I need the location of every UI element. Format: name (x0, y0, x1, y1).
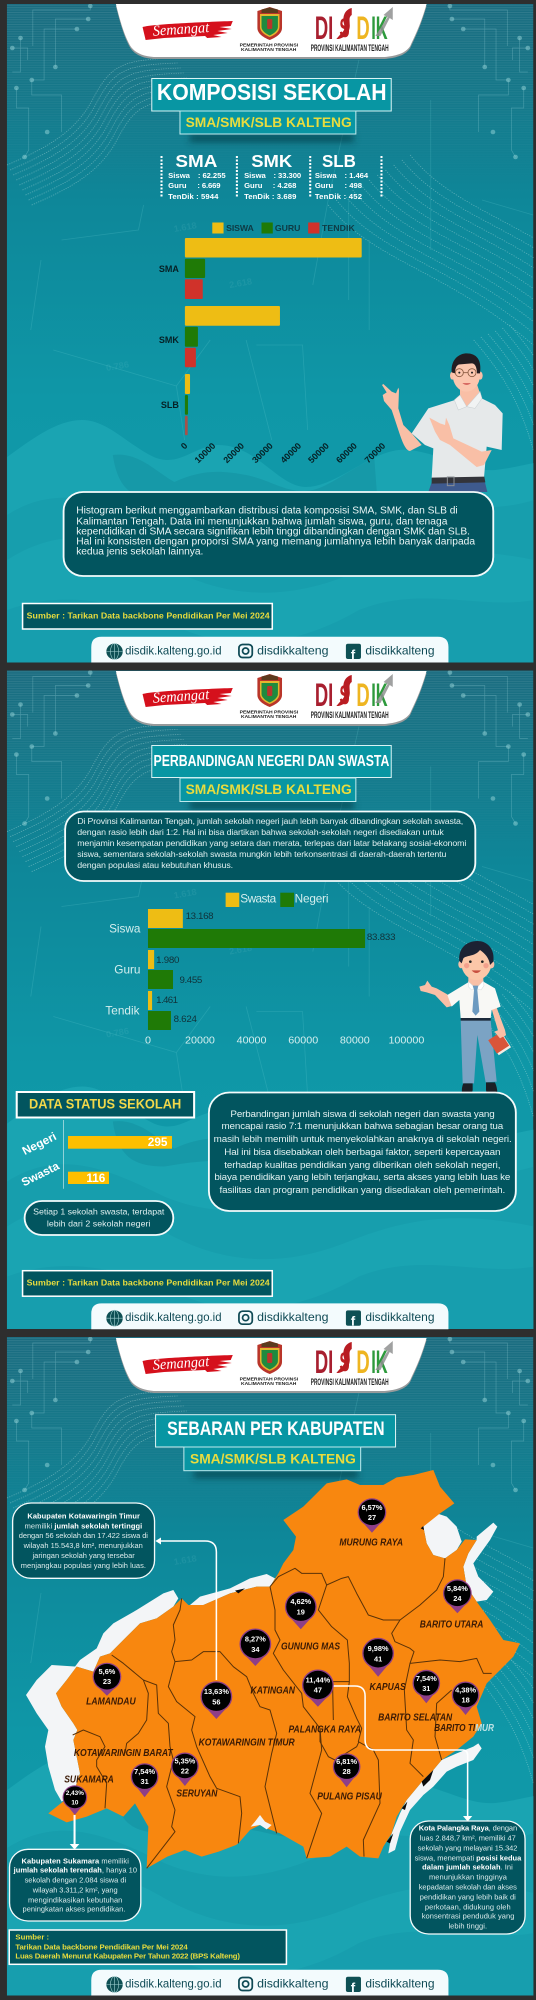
callout: sukamara: Kabupaten Sukamara memiliki (22, 1857, 129, 1866)
callout: palangka raya: Kota Palangka Raya, dengan (419, 1824, 517, 1833)
callout: sukamara: mengindikasikan kebutuhan (28, 1896, 122, 1905)
bar chart: komposisi sekolah: SLB (161, 400, 180, 410)
callout: kotawaringin timur (13, 1503, 155, 1578)
panel 2 background (7, 670, 536, 1330)
text block: histogram description: Kalimantan Tengah. Data ini menunjukkan bahwa jumlah siswa, guru, dan tenaga (76, 516, 448, 527)
panel 1 background (7, 4, 536, 663)
source note panel 3: Sumber : (15, 1933, 49, 1942)
district pins (63, 1498, 479, 1815)
pin seruyan: 22 (181, 1767, 189, 1775)
chart legend: Swasta (240, 893, 277, 906)
panel 3 title: SMA/SMK/SLB KALTENG (190, 1451, 356, 1467)
panel 3 header logos: D (356, 1344, 370, 1380)
panel 2 header logos (116, 671, 427, 726)
source note panel 3: Tarikan Data backbone Pendidikan Per Mei 2024 (15, 1943, 188, 1952)
pin palangka raya (302, 1670, 334, 1707)
pin kotawaringin timur (200, 1681, 232, 1719)
district labels: BARITO SELATAN (378, 1713, 453, 1724)
school stats columns: TenDik : 5944 (168, 192, 219, 201)
panel 2 title (152, 746, 391, 809)
panel 3 header logos: KALIMANTAN TENGAH (241, 1381, 297, 1386)
ratio note (25, 1201, 173, 1235)
panel 1 title (152, 78, 391, 142)
district labels: PALANGKA RAYA (289, 1724, 361, 1735)
chart legend (212, 222, 356, 234)
status bars: Negeri (20, 1130, 59, 1158)
bar chart: negeri vs swasta: Guru (114, 964, 140, 977)
bar chart: negeri vs swasta: 100000 (388, 1035, 424, 1047)
pin katingan: 8,27% (245, 1635, 266, 1643)
text block: rasio negeri swasta: biaya pendidikan yang lebih terjangkau, serta akses yang lebih luas ke (214, 1172, 510, 1183)
callout: palangka raya: dalam jumlah sekolah. Ini (422, 1863, 513, 1872)
footer panel 2: disdik.kalteng.go.id (125, 1311, 222, 1324)
pin barito timur: 18 (461, 1696, 470, 1704)
pin barito timur: 4,38% (455, 1686, 477, 1694)
chart legend: SISWA (226, 223, 254, 233)
district labels: KATINGAN (251, 1686, 296, 1697)
bar chart: negeri vs swasta: 1.980 (156, 955, 179, 966)
footer panel 1: f (351, 647, 356, 662)
text block: rasio negeri swasta: mencapai rasio 7:1 menunjukkan bahwa sebagian besar orang tua (222, 1121, 504, 1132)
school stats columns: SLB (322, 150, 356, 171)
panel 3 header logos: PEMERINTAH PROVINSI (240, 1377, 298, 1381)
panel 1 title: SMA/SMK/SLB KALTENG (186, 115, 352, 131)
pin barito utara: 24 (453, 1594, 462, 1603)
school stats columns: Siswa (244, 171, 267, 180)
pin sukamara: 10 (71, 1799, 79, 1806)
ratio note: Setiap 1 sekolah swasta, terdapat (33, 1207, 165, 1217)
source note panel 2: Sumber : Tarikan Data backbone Pendidikan Per Mei 2024 (27, 1278, 270, 1288)
source note panel 1: Sumber : Tarikan Data backbone Pendidikan Per Mei 2024 (27, 611, 270, 621)
footer panel 3: f (351, 1980, 356, 1995)
school stats columns: : 4.268 (273, 181, 296, 190)
callout: sukamara (10, 1849, 141, 1921)
school stats columns: Siswa (315, 171, 337, 180)
pin kapuas: 9,98% (368, 1644, 389, 1653)
panel 3 header logos: PROVINSI KALIMANTAN TENGAH (311, 1377, 389, 1387)
callout: palangka raya: lebih tinggi. (448, 1922, 487, 1931)
district labels: SERUYAN (176, 1789, 218, 1800)
bar chart: negeri vs swasta (105, 893, 424, 1047)
bar chart: negeri vs swasta: 1.461 (156, 995, 178, 1006)
pin kotawaringin timur: 56 (212, 1698, 220, 1707)
panel 3 header logos: DI (315, 1344, 333, 1380)
text block: rasio negeri swasta: Perbandingan jumlah siswa di sekolah negeri dan swasta yang (230, 1109, 495, 1120)
callout: palangka raya: menunjukkan tingginya (429, 1873, 508, 1882)
footer panel 3: disdikkalteng (257, 1978, 328, 1990)
status bars: 116 (86, 1172, 106, 1185)
callout: palangka raya: perkotaan, didukung oleh (425, 1903, 511, 1912)
district labels: LAMANDAU (86, 1696, 137, 1707)
character: man pointing (382, 353, 503, 492)
district labels: KAPUAS (370, 1682, 406, 1693)
text block: negeri vs swasta intro: menjamin kesempatan pendidikan yang setara dan merata, terlepas dari latar belakang sosial-ekonomi (77, 838, 466, 848)
bar chart: negeri vs swasta: 40000 (237, 1035, 267, 1047)
panel 3 header logos: Semangat (152, 1353, 210, 1374)
panel 1 header logos: S (339, 12, 350, 43)
footer panel 1: disdik.kalteng.go.id (125, 645, 222, 657)
bar chart: komposisi sekolah: SMA (159, 264, 180, 274)
pin barito selatan: 7,54% (416, 1674, 437, 1683)
bar chart: negeri vs swasta: 83.833 (367, 932, 396, 943)
pin katingan: 34 (251, 1645, 260, 1654)
source note panel 1 (23, 604, 272, 629)
panel 1 header logos: PROVINSI KALIMANTAN TENGAH (311, 43, 389, 53)
callout: sukamara: wilayah 3.311,2 km², yang (32, 1886, 118, 1895)
bar chart: negeri vs swasta: 13.168 (186, 911, 214, 922)
bar chart: negeri vs swasta: Siswa (109, 923, 141, 936)
callout: sukamara: peningkatan akses pendidikan. (23, 1905, 125, 1914)
bar chart: komposisi sekolah: 0 (179, 441, 190, 451)
panel 3 title (156, 1415, 396, 1478)
pin murung raya (358, 1498, 386, 1533)
callout: kotawaringin timur: wilayah 15.543,8 km², menunjukkan (23, 1541, 143, 1550)
text block: histogram description: Histogram berikut menggambarkan distribusi data komposisi SMA, SMK, dan SLB di (76, 506, 458, 517)
bar chart: komposisi sekolah: 40000 (278, 441, 303, 465)
panel 2 header logos: PEMERINTAH PROVINSI (240, 710, 298, 714)
pin sukamara: 2,43% (66, 1790, 84, 1797)
callout: kotawaringin timur: jaringan sekolah yang tersebar (31, 1551, 135, 1560)
bar chart: komposisi sekolah: 60000 (334, 441, 359, 465)
school stats columns: Siswa (168, 171, 191, 180)
pin murung raya: 6,57% (361, 1503, 383, 1512)
callout arrows (70, 1538, 472, 1850)
text block: rasio negeri swasta: terhadap kualitas pendidikan yang diberikan oleh sekolah negeri, (224, 1160, 500, 1171)
footer panel 3 (91, 1970, 448, 1996)
school stats columns (162, 150, 381, 201)
pin pulang pisau: 6,81% (336, 1757, 358, 1766)
footer panel 2: f (351, 1314, 356, 1329)
district labels: BARITO TIMUR (434, 1723, 494, 1734)
character: student boy (419, 941, 511, 1093)
chart legend: Negeri (295, 893, 328, 906)
school stats columns: : 1.464 (345, 171, 369, 180)
pin seruyan (171, 1752, 199, 1786)
bar chart: negeri vs swasta: 9.455 (179, 975, 202, 986)
source note panel 2 (23, 1271, 272, 1296)
panel 2 title: SMA/SMK/SLB KALTENG (186, 782, 352, 798)
text block: negeri vs swasta intro: dengan rasio lebih dari 1:2. Hal ini bisa diartikan bahwa sekolah-sekolah negeri disediakan untuk (77, 827, 444, 837)
status bars: Swasta (19, 1159, 62, 1189)
callout: palangka raya: sekolah yang melayani 15.342 (418, 1844, 517, 1853)
pin lamandau: 23 (103, 1677, 111, 1686)
school stats columns: : 6.669 (197, 181, 220, 190)
panel 2 header logos: IK (371, 677, 388, 713)
text block: rasio negeri swasta: Hal ini bisa disebabkan oleh berbagai faktor, seperti kepercayaan (224, 1147, 500, 1158)
footer panel 2 (91, 1303, 448, 1329)
map of Kalimantan Tengah (26, 1470, 520, 1868)
panel 1 header logos: PEMERINTAH PROVINSI (240, 43, 298, 47)
pin barito selatan: 31 (422, 1684, 430, 1693)
panel 2 header logos: PROVINSI KALIMANTAN TENGAH (311, 710, 389, 720)
district labels: BARITO UTARA (420, 1620, 483, 1631)
pin barito utara: 5,84% (447, 1584, 468, 1593)
pin barito utara (443, 1579, 472, 1613)
footer panel 3: disdik.kalteng.go.id (125, 1978, 222, 1990)
panel 2 header logos: KALIMANTAN TENGAH (241, 714, 297, 719)
callout: palangka raya: luas 2.848,7 km², memiliki 47 (420, 1834, 516, 1843)
pin kotawaringin barat (131, 1763, 158, 1797)
bar chart: negeri vs swasta: 80000 (340, 1035, 370, 1047)
panel 3 title: SEBARAN PER KABUPATEN (167, 1419, 385, 1440)
pin katingan (239, 1628, 271, 1666)
chart legend: GURU (275, 223, 300, 233)
bar chart: negeri vs swasta: 60000 (288, 1035, 318, 1047)
bar chart: komposisi sekolah: SMK (159, 335, 180, 345)
callout: palangka raya (410, 1821, 525, 1934)
text block: histogram description: kependidikan di SMA secara signifikan lebih tinggi dibandingkan dengan SMK dan SLB. (76, 527, 470, 538)
pin palangka raya: 11,44% (306, 1676, 331, 1684)
text block: rasio negeri swasta: fasilitas dan program pendidikan yang disediakan oleh pemerintah. (219, 1185, 505, 1196)
pin lamandau (93, 1663, 121, 1696)
school stats columns: : 62.255 (198, 171, 226, 180)
school stats columns: Guru (168, 181, 187, 190)
panel 2 header logos: DI (315, 677, 333, 713)
text block: negeri vs swasta intro: siswa, sementara sekolah-sekolah swasta mungkin lebih terkonsentrasi di daerah-daerah tertentu (77, 849, 447, 859)
panel 1 header logos: Semangat (152, 19, 210, 40)
pin sukamara (63, 1785, 87, 1815)
callout: kotawaringin timur: menjangkau populasi yang lebih luas. (21, 1561, 146, 1570)
footer panel 3: disdikkalteng (365, 1978, 435, 1990)
pin pulang pisau: 28 (343, 1767, 351, 1776)
callout: palangka raya: konsentrasi penduduk yang (422, 1912, 514, 1921)
school stats columns: Guru (244, 181, 263, 190)
panel 3 background (7, 1337, 536, 1996)
pin murung raya: 27 (368, 1513, 376, 1522)
school stats columns: SMA (175, 150, 217, 171)
panel 1 header logos: D (356, 10, 370, 46)
footer panel 1: disdikkalteng (257, 645, 328, 657)
footer panel 2: disdikkalteng (365, 1311, 435, 1324)
callout: kotawaringin timur: dengan 56 sekolah dan 17.422 siswa di (19, 1531, 148, 1540)
pin lamandau: 5,6% (99, 1667, 116, 1676)
bar chart: negeri vs swasta: 20000 (185, 1035, 215, 1047)
school stats columns: Guru (315, 181, 334, 190)
callout: sukamara: jumlah sekolah terendah, hanya 10 (13, 1866, 137, 1875)
footer panel 1 (91, 637, 448, 662)
footer panel 2: disdikkalteng (257, 1311, 328, 1324)
district labels: SUKAMARA (64, 1774, 114, 1785)
school stats columns: : 33.300 (274, 171, 301, 180)
school stats columns: TenDik : 452 (315, 192, 362, 201)
pin palangka raya: 47 (314, 1686, 322, 1694)
panel 3 header logos: IK (371, 1344, 388, 1380)
callout: palangka raya: kepadatan sekolah dan akses (419, 1883, 517, 1892)
district labels: KOTAWARINGIN TIMUR (199, 1738, 295, 1749)
callout: kotawaringin timur: Kabupaten Kotawaringin Timur (27, 1512, 140, 1521)
text block: histogram description: Hal ini konsisten dengan proporsi SMA yang memang jumlahnya lebih banyak daripada (76, 537, 475, 548)
source note panel 3 (9, 1930, 286, 1964)
bar chart: negeri vs swasta: Tendik (105, 1005, 140, 1018)
school stats columns: TenDik : 3.689 (244, 192, 296, 201)
district labels: GUNUNG MAS (281, 1641, 341, 1652)
panel 2 header logos: S (339, 679, 350, 710)
panel 2 header logos: Semangat (152, 686, 210, 707)
bar chart: negeri vs swasta: 0 (145, 1035, 151, 1047)
panel 1 header logos: DI (315, 10, 333, 46)
bar chart: komposisi sekolah: 10000 (193, 441, 217, 465)
text block: rasio negeri swasta (209, 1092, 516, 1211)
pin gunung mas: 4,62% (290, 1597, 312, 1606)
pin kapuas: 41 (374, 1654, 382, 1663)
pin kotawaringin barat: 31 (140, 1777, 149, 1786)
bar chart: komposisi sekolah: 30000 (250, 441, 275, 465)
bar chart: komposisi sekolah: 50000 (306, 441, 331, 465)
panel 1 header logos: IK (371, 10, 388, 46)
bar chart: komposisi sekolah: 70000 (362, 441, 387, 465)
callout: palangka raya: siswa, menempati posisi kedua (415, 1854, 522, 1863)
district labels (64, 1538, 494, 1802)
panel 2 header logos: D (356, 677, 370, 713)
pin barito timur (452, 1682, 479, 1715)
pin kapuas (362, 1638, 394, 1677)
callout: kotawaringin timur: memiliki jumlah sekolah tertinggi (25, 1522, 142, 1531)
text block: rasio negeri swasta: masih lebih memilih untuk menyekolahkan anaknya di sekolah negeri. (214, 1134, 512, 1145)
bar chart: negeri vs swasta: 8.624 (174, 1014, 198, 1025)
status bars (19, 1130, 172, 1189)
school stats columns: SMK (251, 150, 292, 171)
ratio note: lebih dari 2 sekolah negeri (47, 1219, 151, 1229)
text block: negeri vs swasta intro (65, 812, 475, 881)
status bars: 295 (148, 1136, 168, 1149)
text block: negeri vs swasta intro: Di Provinsi Kalimantan Tengah, jumlah sekolah negeri jauh lebih banyak dibandingkan sekolah swasta, (77, 816, 463, 826)
chart legend: TENDIK (322, 223, 356, 233)
pin gunung mas: 19 (297, 1608, 305, 1617)
district labels: KOTAWARINGIN BARAT (74, 1748, 174, 1759)
district labels: MURUNG RAYA (339, 1538, 403, 1549)
callout: palangka raya: pendidikan yang lebih baik di (420, 1893, 516, 1902)
panel 1 title: KOMPOSISI SEKOLAH (157, 79, 387, 105)
bar chart: komposisi sekolah (159, 222, 387, 465)
district labels: PULANG PISAU (317, 1791, 383, 1802)
bar chart: komposisi sekolah: 20000 (221, 441, 246, 465)
pin gunung mas (285, 1591, 317, 1629)
pin pulang pisau (333, 1753, 360, 1787)
callout: sukamara: sekolah dengan 2.084 siswa di (25, 1876, 127, 1885)
heading (17, 1092, 194, 1118)
pin kotawaringin timur: 13,63% (204, 1687, 229, 1696)
source note panel 3: Luas Daerah Menurut Kabupaten Per Tahun 2022 (BPS Kalteng) (15, 1952, 240, 1961)
school stats columns: : 498 (345, 181, 362, 190)
panel 1 header logos: KALIMANTAN TENGAH (241, 47, 297, 52)
panel 1 header logos (116, 4, 427, 59)
text block: histogram description (64, 492, 493, 576)
panel: data status sekolah (17, 1092, 194, 1235)
text block: negeri vs swasta intro: dengan populasi atau kebutuhan khusus. (77, 860, 233, 870)
chart legend (226, 893, 328, 907)
panel 3 header logos (116, 1338, 427, 1393)
pin kotawaringin barat: 7,54% (134, 1767, 156, 1776)
text block: histogram description: kedua jenis sekolah lainnya. (76, 547, 203, 558)
panel 3 header logos: S (339, 1346, 350, 1377)
pin barito selatan (412, 1670, 440, 1703)
pin seruyan: 5,35% (174, 1757, 196, 1765)
panel 2 title: PERBANDINGAN NEGERI DAN SWASTA (154, 753, 389, 770)
heading: DATA STATUS SEKOLAH (29, 1097, 181, 1112)
footer panel 1: disdikkalteng (365, 645, 435, 657)
